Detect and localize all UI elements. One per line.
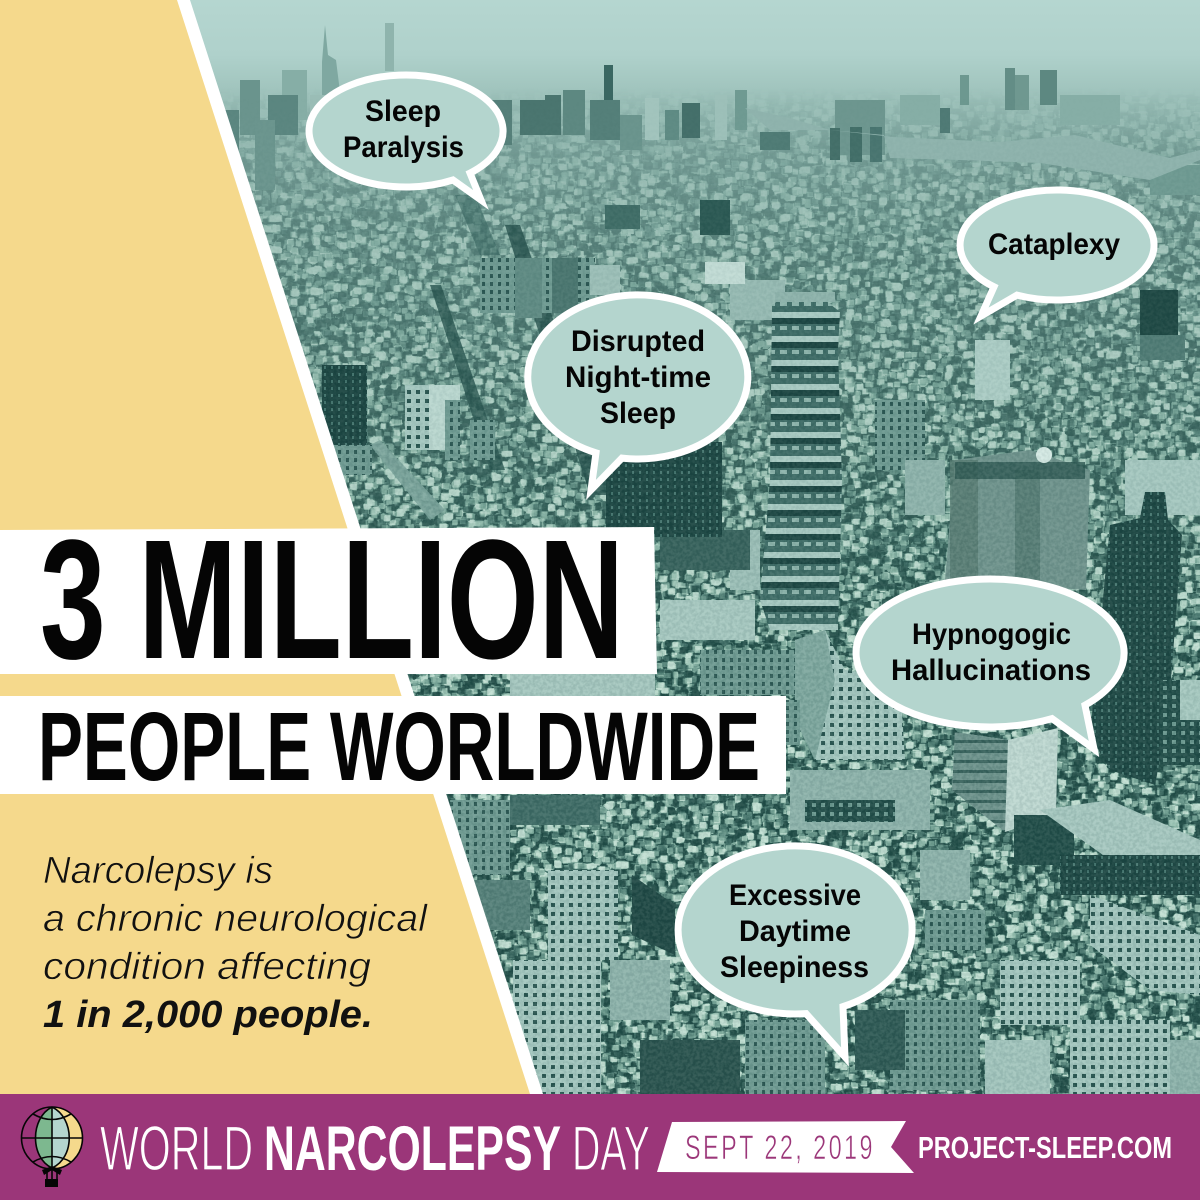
icon: globe hot-air balloon (21, 1107, 83, 1187)
footer bar (0, 1094, 1200, 1200)
footer title: world narcolepsy day: WORLD (100, 1114, 253, 1184)
speech bubble: hypnogogic hallucinations: Hallucinations (891, 654, 1091, 687)
text block: narcolepsy description: Narcolepsy is (43, 850, 273, 892)
large grey office tower (945, 447, 1090, 590)
speech bubble: disrupted night-time sleep: Night-time (565, 361, 711, 394)
lower city blocks (450, 770, 1200, 1094)
speech bubble: sleep paralysis (309, 75, 503, 200)
speech bubble: hypnogogic hallucinations: Hypnogogic (912, 618, 1071, 651)
footer title: world narcolepsy day: DAY (572, 1114, 650, 1184)
date ribbon: SEPT 22, 2019 (685, 1130, 875, 1167)
speech bubble: hypnogogic hallucinations (856, 579, 1124, 749)
text block: narcolepsy description: a chronic neurological (43, 898, 429, 940)
speech bubble: sleep paralysis: Paralysis (343, 131, 464, 164)
speech bubble: disrupted night-time sleep (528, 295, 748, 490)
speech bubble: excessive daytime sleepiness (678, 846, 912, 1057)
photo: aerial city skyline (190, 0, 1200, 1094)
panel: yellow wedge (0, 0, 530, 1094)
right dark tower (1090, 492, 1200, 785)
speech bubble: excessive daytime sleepiness: Sleepiness (720, 951, 869, 984)
speech bubble: sleep paralysis: Sleep (365, 95, 441, 128)
mid-rise grid buildings (730, 630, 905, 760)
dark office block (606, 442, 722, 537)
city blocks and streets (322, 195, 1200, 696)
date ribbon (657, 1121, 914, 1173)
distant skyline (225, 23, 1200, 195)
river (745, 108, 1200, 180)
footer title: world narcolepsy day (100, 1114, 650, 1184)
white high-rise (952, 728, 1058, 832)
headline band: people worldwide (0, 692, 786, 801)
speech bubble: excessive daytime sleepiness: Excessive (729, 879, 861, 912)
headline band: people worldwide: PEOPLE WORLDWIDE (38, 692, 760, 801)
footer title: world narcolepsy day: NARCOLEPSY (264, 1114, 561, 1184)
headline band: 3 million: 3 MILLION (40, 505, 624, 695)
speech bubble: cataplexy (960, 190, 1154, 316)
text block: narcolepsy description: 1 in 2,000 people. (43, 994, 373, 1036)
speech bubble: excessive daytime sleepiness: Daytime (739, 915, 851, 948)
text block: narcolepsy description: condition affecting (43, 946, 371, 988)
speech bubble: disrupted night-time sleep: Sleep (600, 397, 676, 430)
speech bubble: cataplexy: Cataplexy (988, 228, 1120, 261)
text block: narcolepsy description (43, 850, 429, 1036)
white diagonal border strip (0, 0, 543, 1094)
landmark tower (760, 292, 842, 630)
speech bubble: disrupted night-time sleep: Disrupted (571, 325, 705, 358)
